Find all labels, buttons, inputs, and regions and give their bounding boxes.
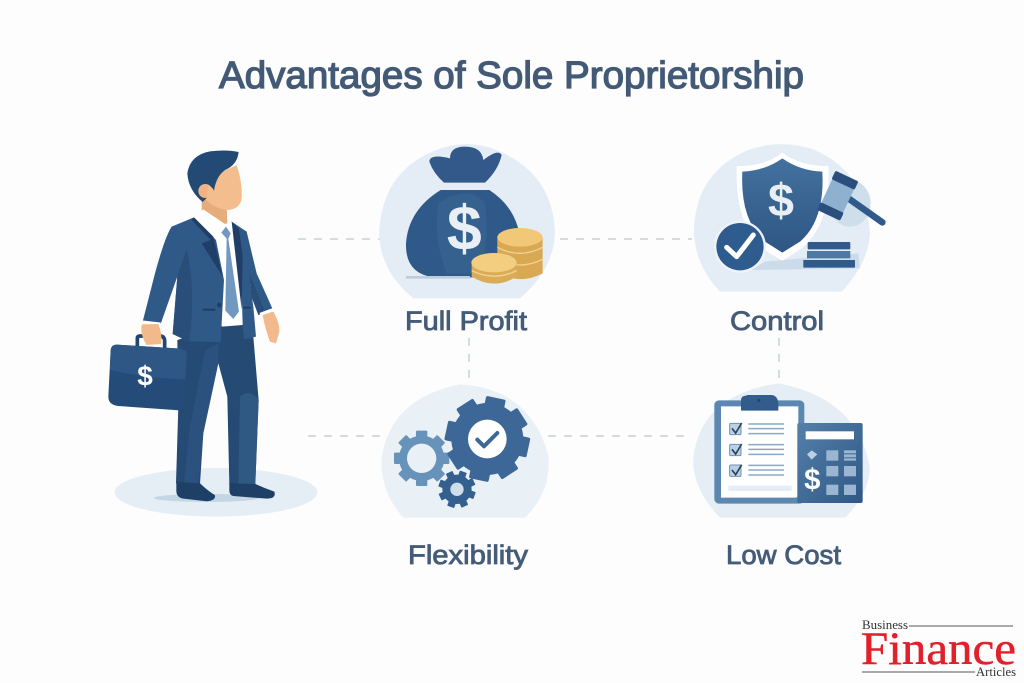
jacket right [232, 222, 272, 339]
icon: clipboard and calculator [693, 383, 870, 518]
shield [737, 153, 829, 261]
icon background [693, 383, 870, 518]
icon: shield and gavel: $ [768, 174, 794, 226]
icon background [694, 144, 870, 292]
hair [187, 150, 239, 202]
icon background [379, 144, 555, 298]
trousers [176, 324, 259, 484]
sound block [808, 242, 850, 249]
icon: clipboard and calculator: $ [804, 464, 820, 497]
briefcase: $ [137, 360, 153, 391]
label: Control: Control [730, 306, 824, 336]
calculator [797, 423, 863, 503]
logo: Business Finance Articles: Articles [976, 664, 1016, 679]
briefcase [108, 336, 187, 411]
coins [471, 228, 543, 284]
shirt [196, 209, 243, 327]
logo: Business Finance Articles: Finance [861, 623, 1016, 675]
icon: money bag with coins: $ [447, 194, 482, 264]
ground ellipse [115, 468, 317, 517]
clipboard [714, 400, 804, 504]
businessman figure [108, 150, 317, 517]
cuffs and hands [143, 322, 161, 324]
label: Full Profit: Full Profit [405, 306, 528, 336]
icon: shield and gavel [694, 144, 882, 292]
label: Flexibility: Flexibility [408, 540, 529, 570]
small blue gear [394, 431, 449, 486]
neck [202, 197, 227, 224]
tie [221, 227, 239, 319]
bag [429, 147, 502, 183]
icon: money bag with coins [379, 144, 555, 298]
head [205, 165, 242, 210]
shoes [176, 482, 215, 501]
check badge [714, 221, 766, 273]
tiny dark gear [438, 471, 476, 508]
icon background [382, 384, 549, 518]
icon: gears [382, 384, 549, 518]
large gear [444, 396, 530, 482]
gavel [817, 171, 882, 227]
checklist [730, 423, 741, 476]
connector lines [298, 239, 779, 436]
jacket left [143, 217, 224, 342]
label: Low Cost: Low Cost [726, 540, 841, 570]
logo: Business Finance Articles: Business [862, 617, 908, 632]
title: Advantages of Sole Proprietorship [219, 55, 804, 97]
